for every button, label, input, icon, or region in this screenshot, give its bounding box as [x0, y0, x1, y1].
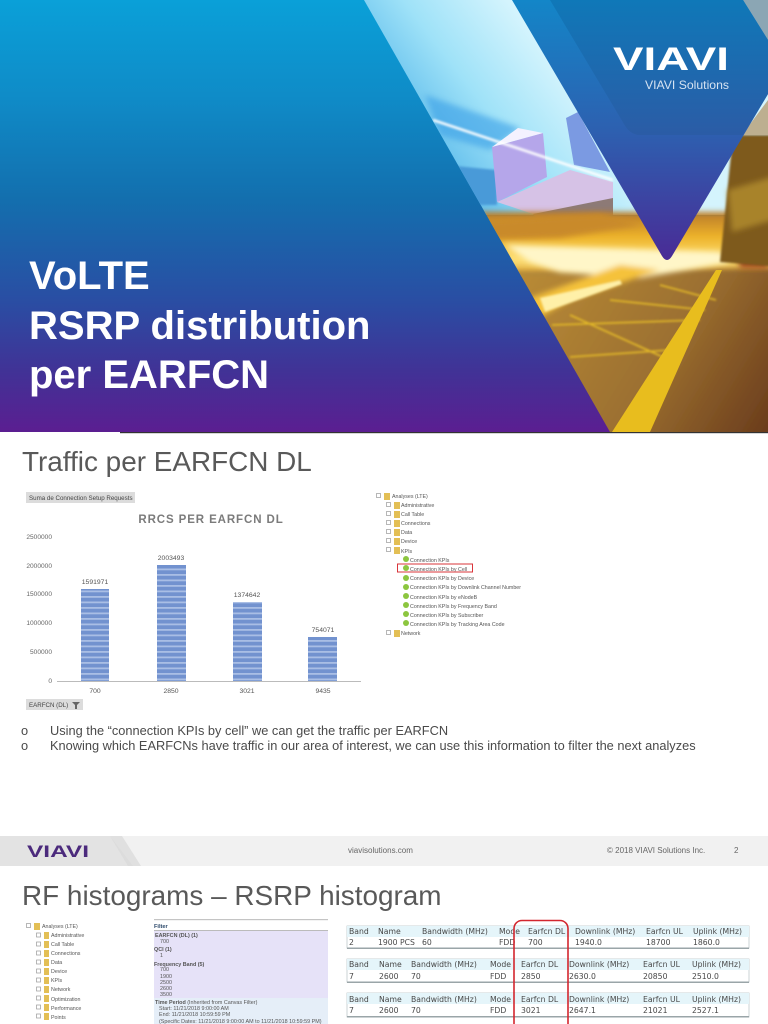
- table: band 7 EARFCN 2850: 2630.0: [569, 972, 596, 981]
- analysis tree: KPIs: [376, 493, 521, 637]
- analysis tree: KPIs: Data: [401, 530, 412, 536]
- logo tab: [550, 0, 768, 135]
- filter panel: Filter: [154, 924, 168, 930]
- table: band 2: Earfcn UL: [646, 927, 684, 936]
- table: band 7 EARFCN 3021: FDD: [490, 1006, 506, 1015]
- bar chart: RRCS per EARFCN DL: 2500000: [26, 534, 52, 541]
- hero title: RSRP distribution: [29, 304, 370, 348]
- table: band 7 EARFCN 2850: 70: [411, 972, 421, 981]
- analysis tree: KPIs: Connection KPIs by Frequency Band: [410, 604, 497, 610]
- filter panel: 1: [160, 953, 163, 959]
- filter panel: [154, 919, 328, 1024]
- analysis tree: KPIs: Device: [401, 539, 417, 545]
- table: band 2: 1940.0: [575, 938, 602, 947]
- bar chart: RRCS per EARFCN DL: 1500000: [26, 591, 52, 598]
- analysis tree: folders: Points: [51, 1015, 66, 1021]
- analysis tree: folders: Call Table: [51, 942, 74, 948]
- table: band 7 EARFCN 2850: Downlink (MHz): [569, 960, 629, 969]
- table: band 2: 1900 PCS: [378, 938, 415, 947]
- analysis tree: KPIs: Connections: [401, 521, 431, 527]
- analysis tree: KPIs: Connection KPIs by Cell: [410, 567, 467, 573]
- bullet list: Knowing which EARFCNs have traffic in our area of interest, we can use this information to filter the next analyzes: [50, 738, 696, 753]
- analysis tree: folders: Administrative: [51, 933, 84, 939]
- table: band 2: 18700: [646, 938, 671, 947]
- table: band 7 EARFCN 3021: Uplink (MHz): [692, 995, 741, 1004]
- analysis tree: folders: Analyses (LTE): [42, 924, 78, 930]
- analysis tree: KPIs: Connection KPIs by Subscriber: [410, 613, 484, 619]
- bar chart: RRCS per EARFCN DL: 700: [89, 688, 101, 695]
- bar chart: RRCS per EARFCN DL: 500000: [30, 649, 52, 656]
- table: band 7 EARFCN 2850: 2850: [521, 972, 541, 981]
- table: band 7 EARFCN 2850: FDD: [490, 972, 506, 981]
- filter panel: EARFCN (DL) (1): [155, 933, 198, 939]
- table: band 7 EARFCN 3021: 3021: [521, 1006, 541, 1015]
- table: band 2: Earfcn DL: [528, 927, 566, 936]
- filter panel: 2600: [160, 986, 172, 992]
- VIAVI logo: VIAVI: [613, 41, 729, 77]
- filter panel: Time Period (Inherited from Canvas Filter): [155, 1000, 258, 1006]
- table: band 7 EARFCN 3021: Earfcn DL: [521, 995, 559, 1004]
- table: band 2: 700: [528, 938, 543, 947]
- filter panel: QCI (1): [154, 947, 172, 953]
- analysis tree: KPIs: Connection KPIs by Device: [410, 576, 474, 582]
- table: band 2: 1860.0: [693, 938, 720, 947]
- red highlight box: [514, 920, 568, 1024]
- analysis tree: KPIs: Administrative: [401, 503, 434, 509]
- bar chart: RRCS per EARFCN DL: EARFCN (DL): [29, 702, 68, 709]
- table: band 7 EARFCN 3021: 2647.1: [569, 1006, 596, 1015]
- filter panel: 1900: [160, 974, 172, 980]
- bar chart: RRCS per EARFCN DL: 0: [48, 678, 52, 685]
- bullet list: Using the “connection KPIs by cell” we can get the traffic per EARFCN: [50, 723, 448, 738]
- bar chart: RRCS per EARFCN DL: Suma de Connection Setup Requests: [29, 495, 133, 502]
- analysis tree: KPIs: Network: [401, 631, 421, 637]
- table: band 7 EARFCN 2850: Mode: [490, 960, 511, 969]
- band tables: [347, 926, 749, 1018]
- slide separator line: [120, 432, 768, 433]
- V shape: [512, 0, 768, 260]
- hero title: VoLTE: [29, 254, 150, 298]
- table: band 7 EARFCN 3021: Earfcn UL: [643, 995, 681, 1004]
- footer bar: © 2018 VIAVI Solutions Inc.: [607, 846, 705, 855]
- bar chart: RRCS per EARFCN DL: [26, 492, 361, 710]
- heading: traffic per EARFCN: Traffic per EARFCN DL: [22, 446, 312, 477]
- filter panel: Start: 11/21/2018 9:00:00 AM: [159, 1006, 229, 1012]
- table: band 2: [347, 926, 749, 949]
- filter panel: 3500: [160, 992, 172, 998]
- bar chart: RRCS per EARFCN DL: 2000000: [26, 563, 52, 570]
- analysis tree: folders: Performance: [51, 1006, 81, 1012]
- table: band 2: 60: [422, 938, 432, 947]
- table: band 7 EARFCN 2850: 7: [349, 972, 354, 981]
- analysis tree: folders: Data: [51, 960, 62, 966]
- analysis tree: folders: KPIs: [51, 978, 63, 984]
- analysis tree: folders: Device: [51, 969, 67, 975]
- analysis tree: KPIs: Connection KPIs by Downlink Channel Number: [410, 585, 521, 591]
- table: band 7 EARFCN 3021: [347, 993, 749, 1018]
- bullet list: o: [21, 738, 28, 753]
- table: band 2: FDD: [499, 938, 515, 947]
- analysis tree: KPIs: Connection KPIs by Tracking Area Code: [410, 622, 505, 628]
- footer logo: VIAVI: [27, 842, 89, 861]
- table: band 7 EARFCN 2850: 2510.0: [692, 972, 719, 981]
- footer bar: 2: [734, 846, 739, 855]
- table: band 7 EARFCN 3021: Bandwidth (MHz): [411, 995, 477, 1004]
- bar chart: RRCS per EARFCN DL: 1374642: [234, 592, 260, 599]
- filter panel: 700: [160, 939, 169, 945]
- table: band 7 EARFCN 2850: Earfcn UL: [643, 960, 681, 969]
- footer bar: [0, 836, 768, 866]
- table: band 7 EARFCN 3021: 2527.1: [692, 1006, 719, 1015]
- filter panel: Frequency Band (5): [154, 962, 205, 968]
- table: band 7 EARFCN 3021: 7: [349, 1006, 354, 1015]
- bar chart: RRCS per EARFCN DL: RRCS PER EARFCN DL: [138, 514, 284, 526]
- analysis tree: KPIs: Call Table: [401, 512, 424, 518]
- heading: RF histograms: RF histograms – RSRP histogram: [22, 880, 442, 911]
- table: band 7 EARFCN 2850: 20850: [643, 972, 668, 981]
- table: band 7 EARFCN 2850: Band: [349, 960, 369, 969]
- bullet list: o: [21, 723, 28, 738]
- analysis tree: folders: [26, 923, 84, 1021]
- analysis tree: KPIs: Analyses (LTE): [392, 494, 428, 500]
- table: band 7 EARFCN 2850: 2600: [379, 972, 399, 981]
- bar chart: RRCS per EARFCN DL: 9435: [315, 688, 331, 695]
- analysis tree: folders: Connections: [51, 951, 81, 957]
- table: band 7 EARFCN 2850: Bandwidth (MHz): [411, 960, 477, 969]
- table: band 2: Mode: [499, 927, 520, 936]
- table: band 7 EARFCN 3021: Name: [379, 995, 402, 1004]
- table: band 2: 2: [349, 938, 354, 947]
- VIAVI logo: VIAVI Solutions: [645, 79, 729, 92]
- filter panel: End: 11/21/2018 10:59:59 PM: [159, 1012, 231, 1018]
- bar chart: RRCS per EARFCN DL: 1000000: [26, 620, 52, 627]
- table: band 2: Uplink (MHz): [693, 927, 742, 936]
- table: band 7 EARFCN 3021: 21021: [643, 1006, 668, 1015]
- VIAVI logo: [613, 41, 729, 92]
- bullet list: [21, 723, 696, 753]
- table: band 2: Downlink (MHz): [575, 927, 635, 936]
- analysis tree: folders: Optimization: [51, 997, 80, 1003]
- analysis tree: KPIs: Connection KPIs by eNodeB: [410, 595, 478, 601]
- hero banner: [0, 0, 768, 450]
- table: band 7 EARFCN 2850: [347, 959, 749, 983]
- bar chart: RRCS per EARFCN DL: 2850: [163, 688, 179, 695]
- bar chart: RRCS per EARFCN DL: 3021: [239, 688, 255, 695]
- table: band 7 EARFCN 2850: Earfcn DL: [521, 960, 559, 969]
- table: band 2: Band: [349, 927, 369, 936]
- hero title: [29, 254, 370, 397]
- table: band 7 EARFCN 2850: Name: [379, 960, 402, 969]
- table: band 7 EARFCN 3021: Mode: [490, 995, 511, 1004]
- filter panel: 2500: [160, 980, 172, 986]
- hero title: per EARFCN: [29, 353, 269, 397]
- table: band 7 EARFCN 3021: 70: [411, 1006, 421, 1015]
- analysis tree: folders: Network: [51, 987, 71, 993]
- filter panel: 700: [160, 967, 169, 973]
- table: band 2: Name: [378, 927, 401, 936]
- hero city photo: [364, 0, 768, 450]
- table: band 7 EARFCN 3021: 2600: [379, 1006, 399, 1015]
- analysis tree: KPIs: Connection KPIs: [410, 558, 450, 564]
- bar chart: RRCS per EARFCN DL: 2003493: [158, 555, 184, 562]
- table: band 7 EARFCN 2850: Uplink (MHz): [692, 960, 741, 969]
- table: band 7 EARFCN 3021: Downlink (MHz): [569, 995, 629, 1004]
- footer bar: viavisolutions.com: [348, 846, 413, 855]
- bar chart: RRCS per EARFCN DL: 1591971: [82, 579, 108, 586]
- analysis tree: KPIs: KPIs: [401, 549, 413, 555]
- bar chart: RRCS per EARFCN DL: 754071: [312, 627, 335, 634]
- table: band 2: Bandwidth (MHz): [422, 927, 488, 936]
- table: band 7 EARFCN 3021: Band: [349, 995, 369, 1004]
